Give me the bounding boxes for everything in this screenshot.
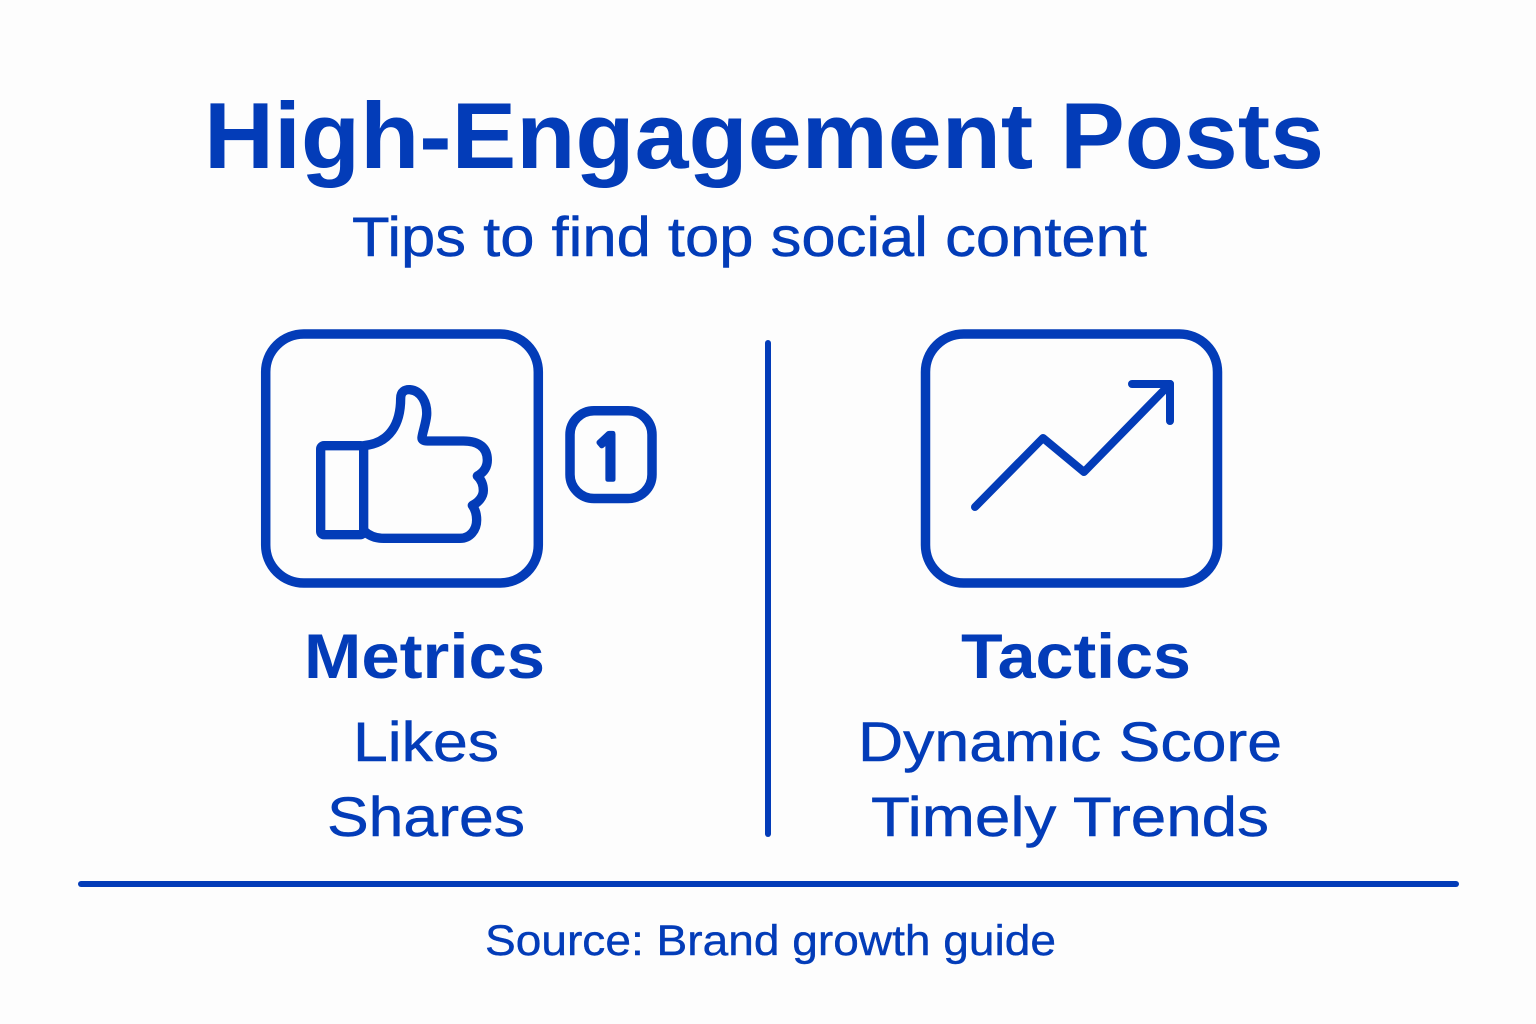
source note: Source: Brand growth guide xyxy=(485,917,1056,965)
panel: metrics xyxy=(266,334,652,848)
subtitle: Tips to find top social content xyxy=(352,205,1147,268)
text: timely trends: Timely Trends xyxy=(871,785,1269,848)
vertical divider xyxy=(765,343,771,834)
heading: tactics: Tactics xyxy=(961,622,1191,692)
text: likes: Likes xyxy=(353,710,499,773)
panel: tactics xyxy=(858,334,1282,848)
icon: thumbs up in rounded square xyxy=(266,334,538,583)
badge: number 1 xyxy=(570,411,652,498)
footer rule xyxy=(81,881,1456,887)
badge: number 1: 1 xyxy=(590,429,628,490)
icon: trend arrow in rounded square xyxy=(926,334,1218,583)
text: dynamic score: Dynamic Score xyxy=(858,710,1282,773)
title: High-Engagement Posts xyxy=(204,83,1324,188)
text: shares: Shares xyxy=(327,785,525,848)
heading: metrics: Metrics xyxy=(304,622,545,692)
